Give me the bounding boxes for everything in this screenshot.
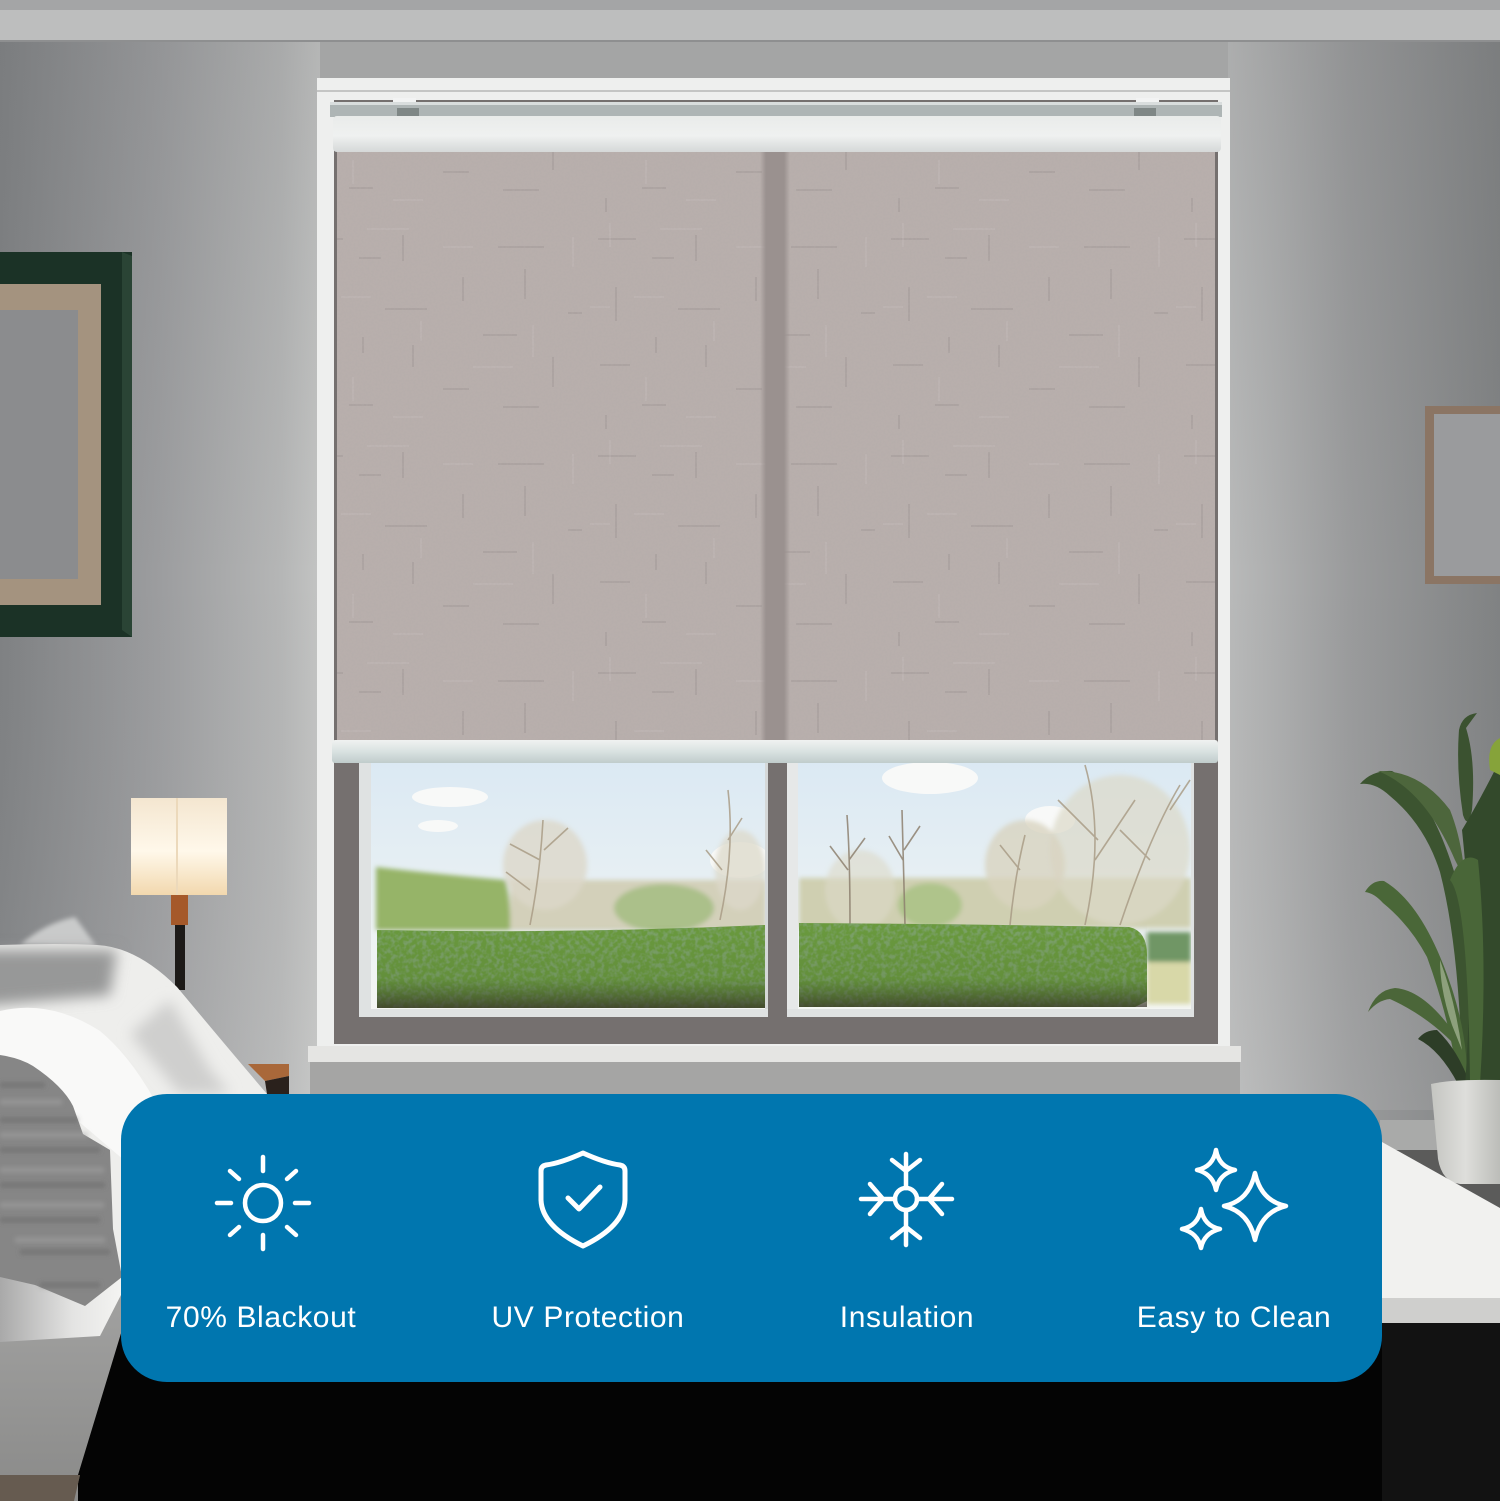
feature: Insulation <box>840 1154 974 1334</box>
lamp <box>131 798 227 990</box>
label: 70% Blackout: 70% Blackout <box>166 1301 356 1334</box>
label: Insulation: Insulation <box>840 1301 974 1334</box>
mullions <box>359 762 371 1017</box>
bottom rail <box>332 740 1218 763</box>
feature panel <box>121 1094 1382 1382</box>
feature: 70% Blackout <box>166 1157 356 1334</box>
view: hedge <box>377 923 1147 1008</box>
bedding <box>0 917 267 1501</box>
duvet roll <box>0 1008 155 1161</box>
plant pot <box>1431 1080 1500 1184</box>
picture frame right <box>1425 406 1500 584</box>
icon: snowflake <box>861 1154 952 1245</box>
duvet grey shadow <box>0 950 117 1007</box>
view: bare branches <box>506 765 1190 925</box>
blind centre seam shadow <box>760 150 790 742</box>
window frame <box>317 78 1230 1048</box>
pillow <box>20 917 97 947</box>
picture frame left <box>0 252 132 637</box>
nightstand <box>248 1064 289 1094</box>
icon: sparkles <box>1182 1150 1286 1248</box>
sheet <box>0 1270 122 1501</box>
label: Easy to Clean: Easy to Clean <box>1137 1301 1331 1334</box>
grey folds <box>0 1055 122 1306</box>
duvet <box>0 944 267 1290</box>
floor under bed <box>0 1475 80 1501</box>
feature: Easy to Clean <box>1137 1150 1331 1334</box>
label: UV Protection: UV Protection <box>492 1301 684 1334</box>
feature: UV Protection <box>492 1153 684 1334</box>
icon: shield with check <box>541 1153 625 1246</box>
plant <box>1360 713 1500 1086</box>
window <box>308 78 1241 1094</box>
window sill <box>308 1046 1241 1062</box>
view: sky <box>371 762 1193 1012</box>
black bed base <box>0 1320 1382 1501</box>
duvet shade <box>130 1000 230 1094</box>
bright sheet patch <box>0 1270 122 1342</box>
icon: sun <box>217 1157 309 1249</box>
bed on right <box>1382 1142 1500 1501</box>
view: pale tree band <box>376 775 1191 1004</box>
view: clouds <box>412 762 1075 878</box>
room background wall <box>0 0 1500 1130</box>
floor and baseboard right <box>1380 1120 1500 1210</box>
headrail <box>330 102 1222 117</box>
blind fabric <box>337 150 1215 742</box>
